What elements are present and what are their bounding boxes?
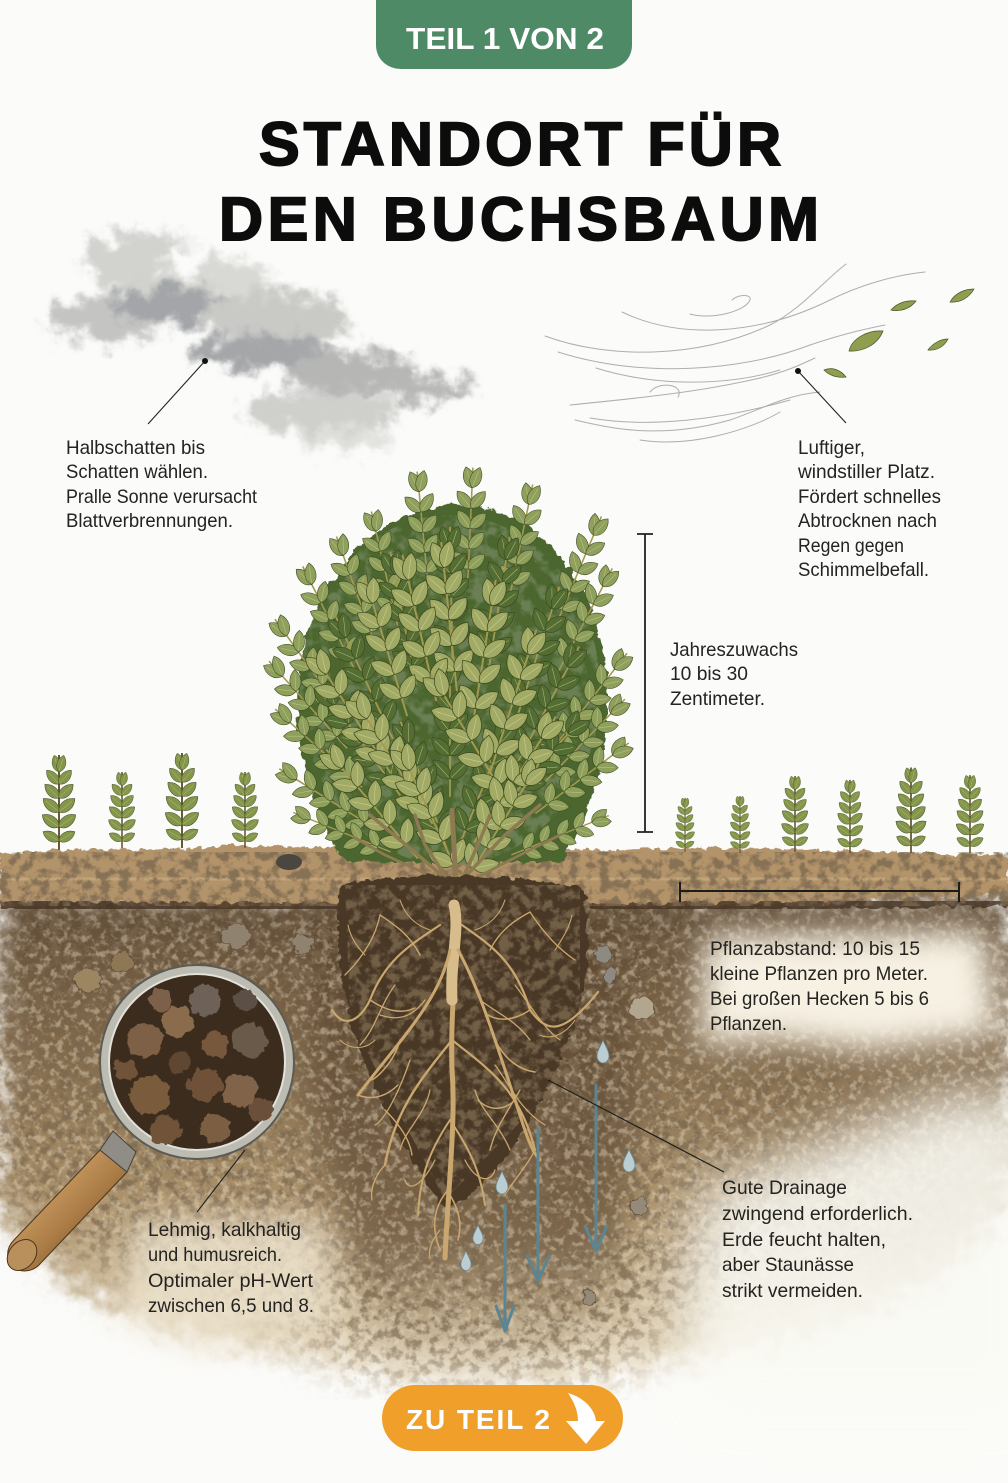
root ball <box>338 876 588 1210</box>
light wash lower left <box>120 1220 335 1350</box>
text: spacing: Pflanzen. <box>710 1013 787 1035</box>
text: soil type: Lehmig, kalkhaltig <box>148 1219 301 1241</box>
text: wind: Regen gegen <box>798 535 904 557</box>
text: drainage <box>722 1177 913 1302</box>
text: spacing: Pflanzabstand: 10 bis 15 <box>710 938 920 960</box>
text: spacing: kleine Pflanzen pro Meter. <box>710 963 928 985</box>
text: annual growth: 10 bis 30 <box>670 663 748 685</box>
light wash lower right <box>680 1090 1008 1420</box>
text: wind: Abtrocknen nach <box>798 510 937 532</box>
text: shade: Halbschatten bis <box>66 437 205 459</box>
front branches <box>292 537 578 897</box>
core of darker soil below the root ball <box>310 900 640 1385</box>
text: drainage: Gute Drainage <box>722 1177 847 1199</box>
magnifying glass <box>1 965 294 1276</box>
height bracket <box>637 534 653 832</box>
soil stones <box>74 924 655 1306</box>
title: STANDORT FÜR <box>259 110 781 178</box>
text: annual growth: Jahreszuwachs <box>670 639 798 661</box>
boxwood shrub <box>253 464 644 897</box>
text: drainage: aber Staunässe <box>722 1254 854 1276</box>
shrub mottling <box>300 515 600 865</box>
spacing bracket <box>680 882 959 902</box>
text: wind: Fördert schnelles <box>798 486 941 508</box>
back branches <box>253 464 644 871</box>
button: to part 2 <box>382 1385 623 1451</box>
text: wind <box>797 437 941 581</box>
callout: shade <box>148 358 208 424</box>
text: soil type: Optimaler pH-Wert <box>148 1270 314 1292</box>
soil speckle <box>0 880 1008 1400</box>
text: shade: Schatten wählen. <box>66 461 208 483</box>
middle branches <box>301 524 602 856</box>
handle <box>8 1150 127 1271</box>
text: wind: Schimmelbefall. <box>798 559 929 581</box>
icon: wind lines <box>545 264 925 442</box>
saplings <box>39 752 986 853</box>
roots <box>332 900 598 1258</box>
text: spacing: Bei großen Hecken 5 bis 6 <box>710 988 929 1010</box>
title: DEN BUCHSBAUM <box>219 185 819 253</box>
text: soil type: und humusreich. <box>148 1244 282 1266</box>
shrub stems <box>355 805 560 882</box>
title <box>219 110 819 253</box>
text: drainage: Erde feucht halten, <box>722 1229 886 1251</box>
callout: soil type <box>197 1150 245 1212</box>
text: annual growth: Zentimeter. <box>670 688 765 710</box>
button: to part 2: ZU TEIL 2 <box>406 1404 550 1435</box>
callout: wind <box>795 368 846 423</box>
drainage arrows <box>496 1085 607 1331</box>
top badge: part 1 of 2 <box>376 0 632 69</box>
text: soil type: zwischen 6,5 und 8. <box>148 1295 314 1317</box>
text: drainage: strikt vermeiden. <box>722 1280 863 1302</box>
handle end <box>1 1234 43 1276</box>
icon: wind leaves <box>824 289 974 377</box>
icon: cloud <box>48 230 475 451</box>
text: annual growth <box>670 639 798 710</box>
top badge: part 1 of 2: TEIL 1 VON 2 <box>406 21 604 56</box>
text: wind: Luftiger, <box>798 437 865 459</box>
topsoil layer <box>0 846 1008 908</box>
icon: curved arrow <box>566 1393 605 1444</box>
text: shade: Blattverbrennungen. <box>66 510 233 532</box>
text: shade: Pralle Sonne verursacht <box>66 486 258 508</box>
soil cross-section <box>0 880 1008 1420</box>
text: shade <box>66 437 258 532</box>
lens ring <box>100 965 294 1159</box>
shrub dark mass <box>297 505 607 862</box>
light wash behind right text <box>700 930 998 1050</box>
callout: drainage <box>548 1080 724 1172</box>
ferrule <box>100 1131 136 1172</box>
root ball speckle <box>345 885 580 1200</box>
soil clumps <box>114 984 272 1145</box>
water drops <box>461 1040 635 1270</box>
text: soil type <box>148 1219 314 1317</box>
text: spacing <box>710 938 929 1035</box>
lens <box>109 974 285 1150</box>
text: wind: windstiller Platz. <box>797 461 935 483</box>
text: drainage: zwingend erforderlich. <box>722 1203 913 1225</box>
